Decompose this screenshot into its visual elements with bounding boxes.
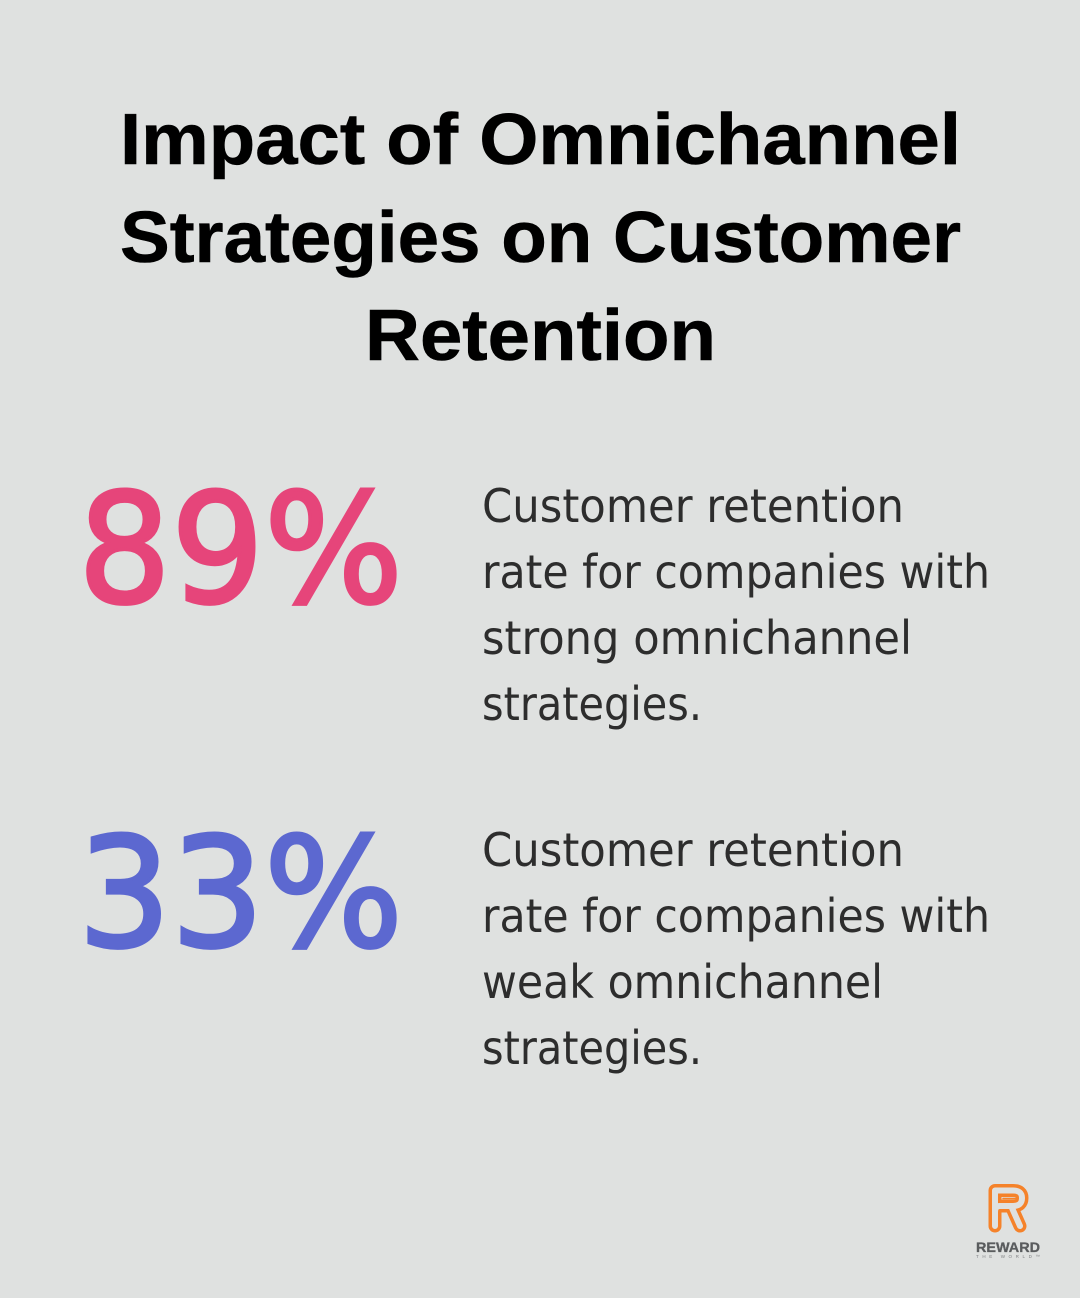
stat: 89%: 89%: [78, 461, 403, 638]
description: weak omnichannel: strategies.: [482, 1021, 702, 1075]
logo: Reward the World: [976, 1190, 1040, 1259]
description: strong omnichannel: rate for companies with: [482, 545, 990, 599]
logo wordmark: REWARD: [976, 1240, 1040, 1255]
description: strong omnichannel: [482, 479, 990, 731]
title: Strategies on Customer: [120, 198, 961, 278]
description: strong omnichannel: Customer retention: [482, 479, 904, 533]
icon: orange R mark: [995, 1190, 1022, 1226]
logo tagline: THE WORLD™: [976, 1254, 1040, 1259]
description: weak omnichannel: Customer retention: [482, 823, 904, 877]
description: weak omnichannel: rate for companies with: [482, 889, 990, 943]
description: strong omnichannel: strong omnichannel: [482, 611, 912, 665]
title: Retention: [365, 296, 716, 376]
description: strong omnichannel: strategies.: [482, 677, 702, 731]
title: [120, 100, 961, 376]
stat: 33%: 33%: [78, 805, 403, 982]
description: weak omnichannel: weak omnichannel: [482, 955, 883, 1009]
title: Impact of Omnichannel: [120, 100, 961, 180]
description: weak omnichannel: [482, 823, 990, 1075]
